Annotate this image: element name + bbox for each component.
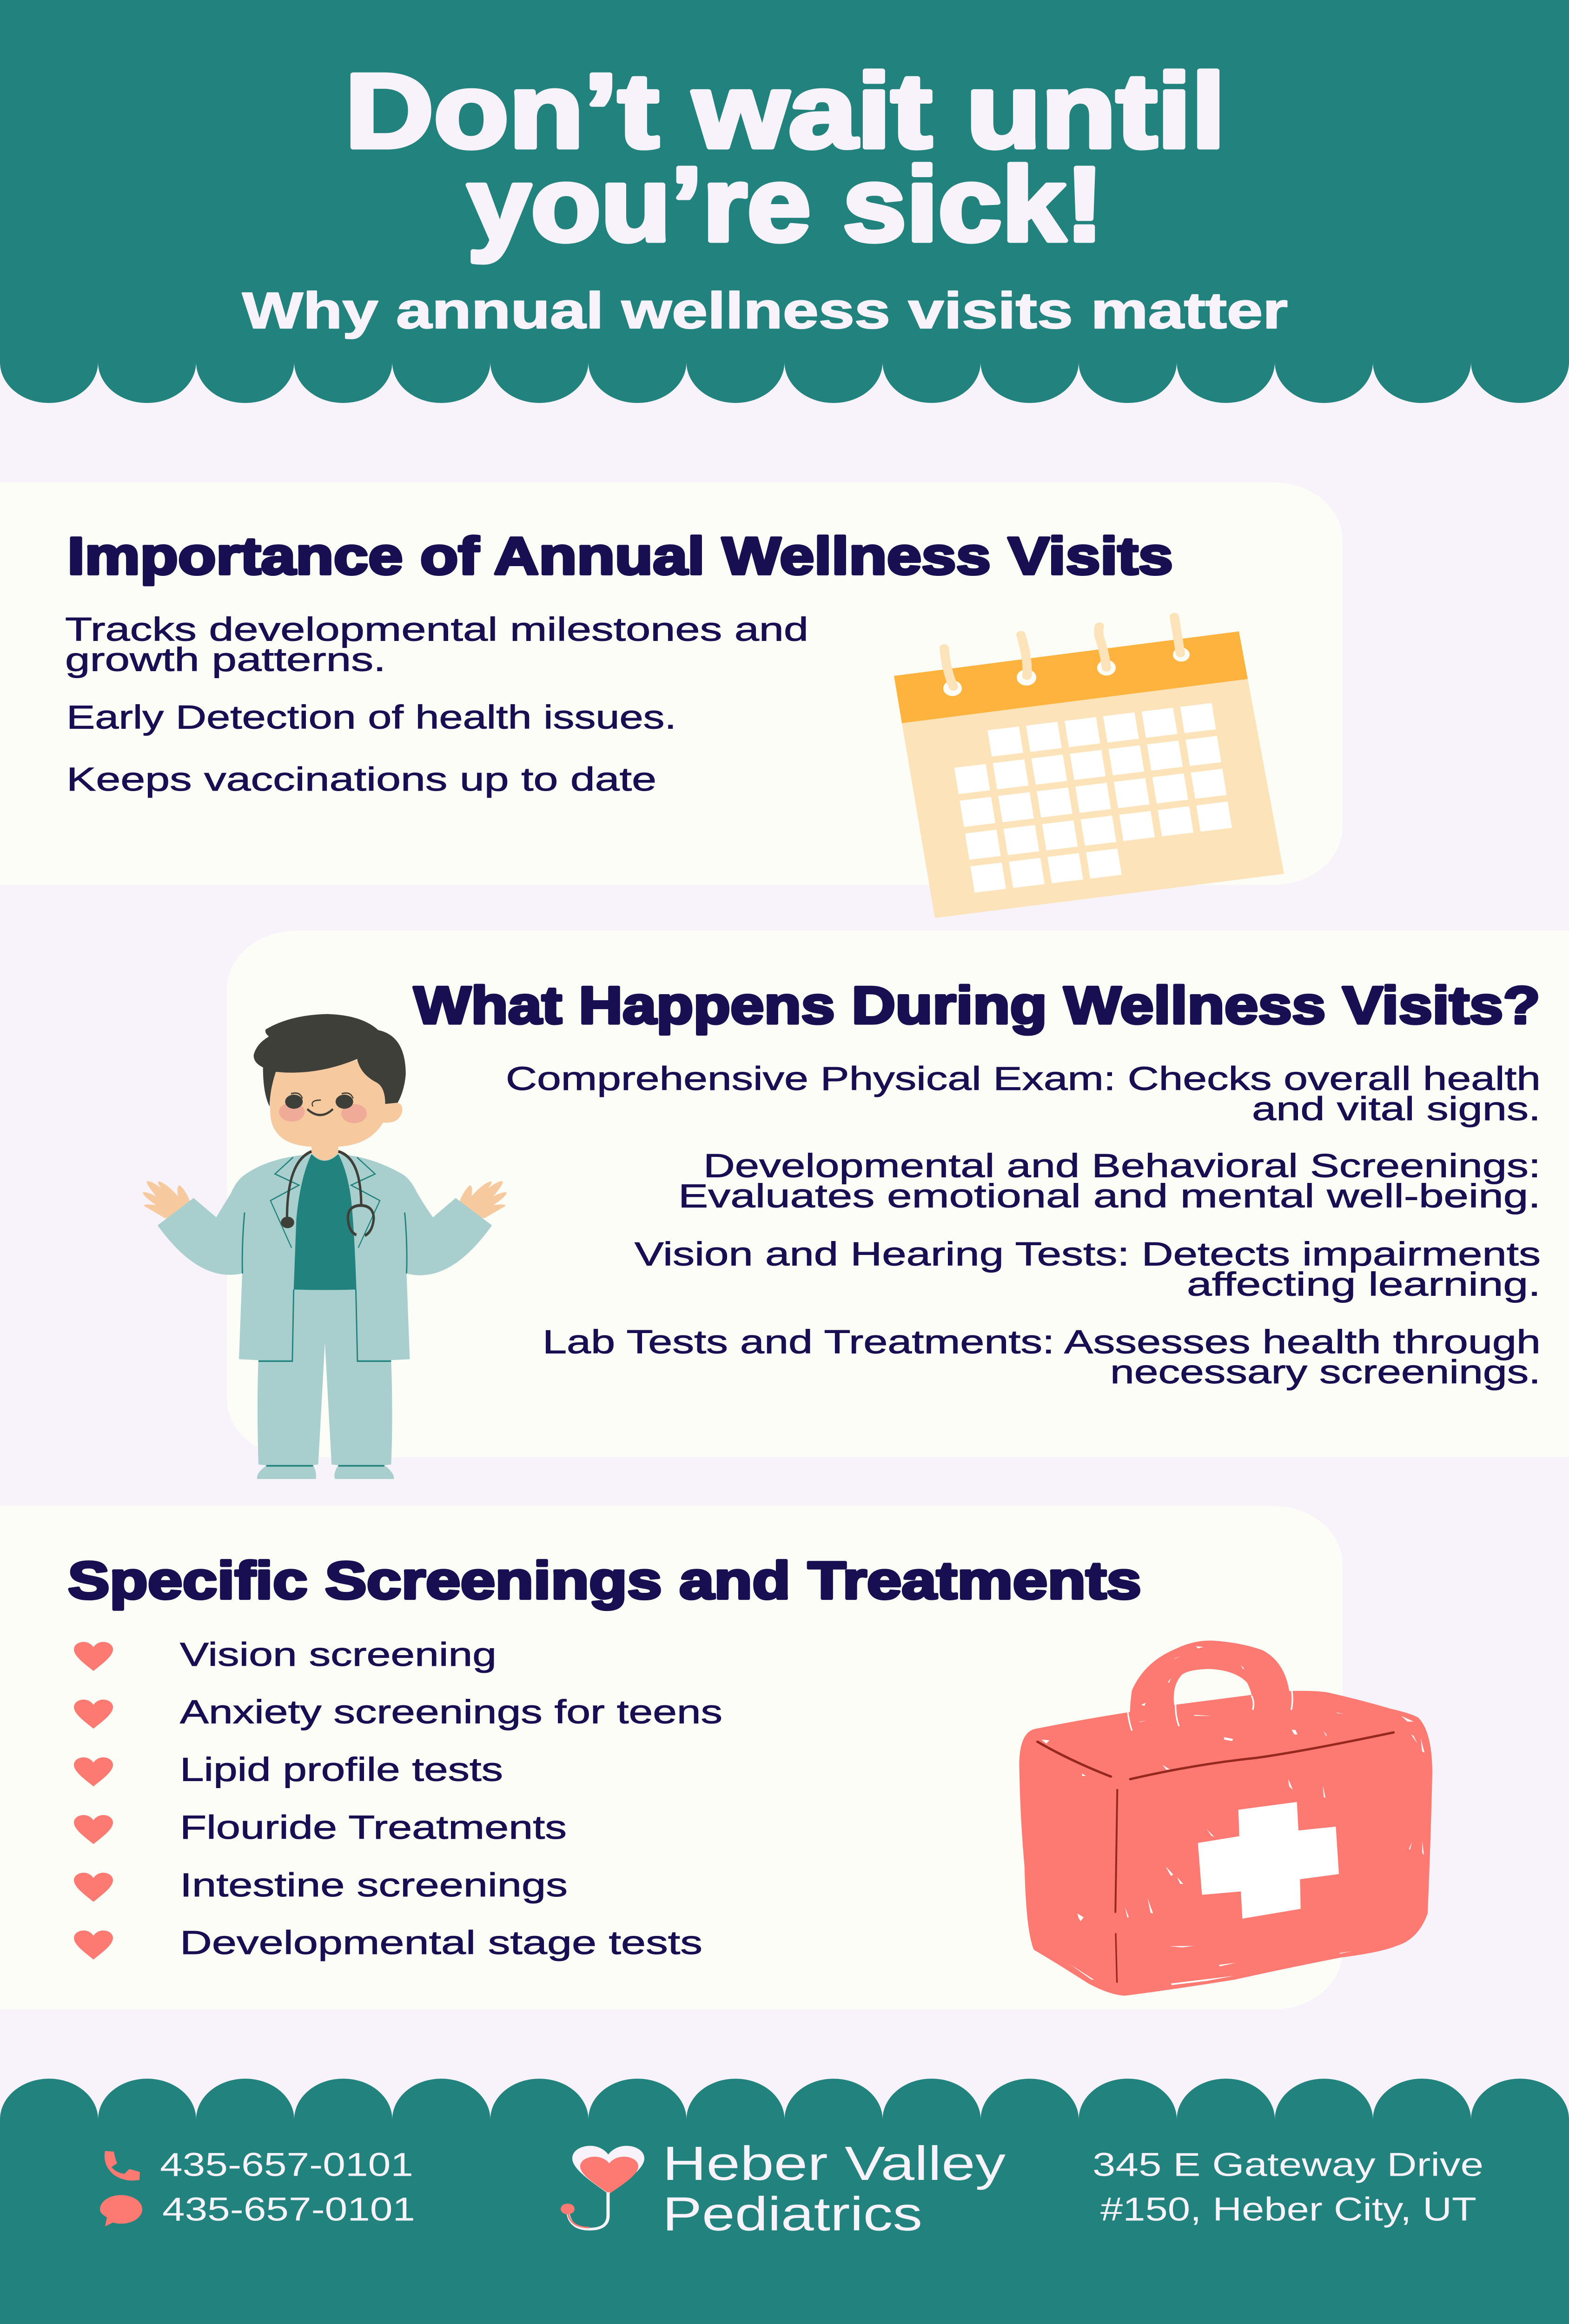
list item: vision screening: Vision screening — [180, 1636, 497, 1673]
list item: anxiety screenings: Anxiety screenings for teens — [180, 1693, 722, 1730]
text block: screenings: Developmental and Behavioral Screenings: — [703, 1147, 1541, 1184]
icon: first aid kit — [1019, 1641, 1432, 1996]
list item: developmental stage tests: Developmental stage tests — [180, 1924, 702, 1961]
list item: vision screening — [74, 1636, 497, 1673]
list item: intestine screenings: Intestine screenings — [180, 1866, 568, 1903]
phone number: 435-657-0101 — [160, 2146, 413, 2183]
list item: flouride treatments: Flouride Treatments — [180, 1809, 567, 1846]
panel background — [0, 1506, 1343, 2009]
text block: reasons: Tracks developmental milestones and — [65, 610, 808, 648]
subtitle: Why annual wellness visits matter — [242, 282, 1288, 339]
logo wordmark — [662, 2137, 1006, 2241]
title: you’re sick! — [467, 145, 1104, 263]
text block: lab tests: necessary screenings. — [1110, 1353, 1541, 1390]
list item: lipid profile — [74, 1750, 503, 1788]
panel: importance of annual wellness visits — [0, 482, 1343, 918]
text block: vision and hearing — [635, 1235, 1541, 1303]
text block: vision and hearing: Vision and Hearing Tests: Detects impairments — [635, 1235, 1541, 1273]
address: 345 E Gateway Drive — [1092, 2146, 1483, 2183]
text block: exam: and vital signs. — [1252, 1090, 1541, 1127]
heading: What Happens During Wellness Visits? — [414, 976, 1540, 1035]
icon: chat bubble — [100, 2195, 142, 2226]
list item: lipid profile: Lipid profile tests — [180, 1750, 503, 1788]
panel: what happens during wellness visits — [143, 931, 1569, 1479]
text block: screenings: Evaluates emotional and mental well-being. — [678, 1177, 1541, 1215]
text block: reasons: growth patterns. — [65, 640, 386, 678]
scalloped teal footer background — [0, 2079, 1569, 2324]
text block: reasons: Early Detection of health issues. — [66, 698, 676, 736]
text block: exam — [506, 1060, 1541, 1127]
heading: Importance of Annual Wellness Visits — [67, 527, 1173, 585]
text block: lab tests: Lab Tests and Treatments: Assesses health through — [543, 1323, 1541, 1360]
scalloped teal header background — [0, 0, 1569, 403]
logo: heart stethoscope — [561, 2146, 644, 2229]
logo wordmark: Pediatrics — [662, 2187, 922, 2241]
logo wordmark: Heber Valley — [662, 2137, 1006, 2191]
illustration: doctor — [143, 1014, 507, 1479]
header banner — [0, 0, 1569, 403]
text block: reasons — [65, 610, 808, 798]
title: Don’t wait until — [345, 52, 1225, 170]
icon: phone — [105, 2151, 140, 2181]
text block: lab tests — [543, 1323, 1541, 1390]
panel: specific screenings and treatments — [0, 1506, 1432, 2009]
text block: reasons: Keeps vaccinations up to date — [66, 760, 656, 798]
text block: vision and hearing: affecting learning. — [1187, 1265, 1541, 1303]
panel background — [227, 931, 1569, 1457]
address: #150, Heber City, UT — [1100, 2190, 1476, 2228]
hands, pants, coat, shirt, stethoscope and head — [143, 1014, 507, 1479]
text block: exam: Comprehensive Physical Exam: Checks overall health — [506, 1060, 1541, 1097]
footer banner — [0, 2079, 1569, 2324]
message number: 435-657-0101 — [162, 2190, 415, 2228]
text block: screenings — [678, 1147, 1541, 1215]
address — [1092, 2146, 1483, 2228]
panel background — [0, 482, 1343, 885]
icon: calendar — [894, 617, 1284, 918]
title — [345, 52, 1225, 263]
heading: Specific Screenings and Treatments — [68, 1551, 1141, 1610]
